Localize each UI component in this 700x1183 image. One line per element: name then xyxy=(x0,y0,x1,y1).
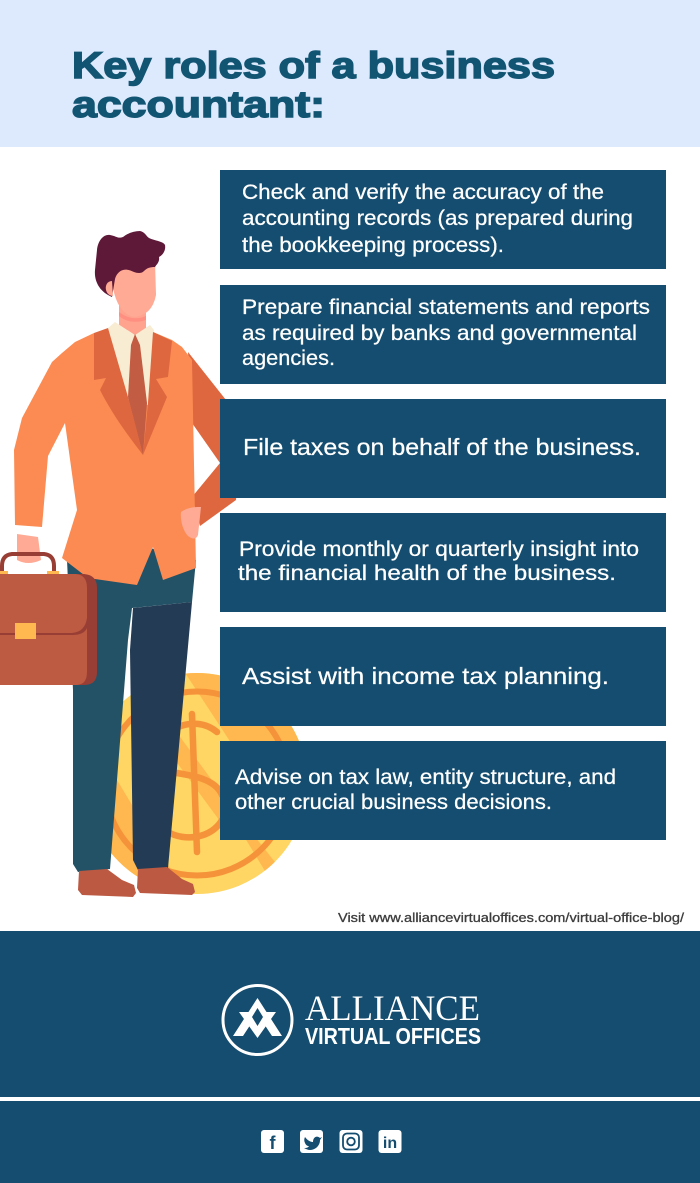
shoes xyxy=(78,869,136,897)
header panel xyxy=(0,0,700,147)
neck xyxy=(119,300,146,340)
source link text: Visit www.alliancevirtualoffices.com/virtual-office-blog/ xyxy=(338,911,685,925)
panel: monthly insight xyxy=(220,513,666,612)
panel: file taxes: File taxes on behalf of the business. xyxy=(243,434,641,460)
panel: monthly insight: the financial health of the business. xyxy=(238,562,616,585)
trousers xyxy=(67,548,196,872)
illustration: coin xyxy=(111,673,299,894)
face xyxy=(112,262,156,317)
title xyxy=(72,45,555,125)
panel: check records: accounting records (as prepared during xyxy=(242,207,633,230)
panel: check records: Check and verify the accuracy of the xyxy=(242,181,604,204)
panel: financial statements: agencies. xyxy=(242,347,335,370)
tie xyxy=(128,334,147,455)
briefcase xyxy=(0,554,97,685)
icon: facebook: f xyxy=(270,1133,276,1153)
logo text: ALLIANCE xyxy=(305,988,480,1028)
illustration: accountant figure xyxy=(0,231,240,897)
panel: check records: the bookkeeping process). xyxy=(242,234,504,257)
icon: linkedin: in xyxy=(383,1135,397,1152)
hand on hip xyxy=(181,507,201,538)
panel: financial statements xyxy=(220,285,666,384)
footer panel: social xyxy=(0,1101,700,1183)
panel: financial statements: as required by banks and governmental xyxy=(242,322,637,345)
footer panel: logo xyxy=(0,931,700,1097)
panel: file taxes xyxy=(220,399,666,498)
jacket xyxy=(14,332,196,585)
panel: tax planning xyxy=(220,627,666,726)
hair xyxy=(95,231,165,297)
icon: twitter xyxy=(300,1130,323,1153)
title: Key roles of a business xyxy=(72,45,555,86)
icon: facebook xyxy=(261,1130,284,1153)
back arm xyxy=(188,352,240,526)
logo text xyxy=(305,988,481,1049)
logo icon xyxy=(223,986,292,1054)
ear xyxy=(106,281,113,296)
icon: instagram xyxy=(340,1130,362,1153)
icon: linkedin xyxy=(378,1130,402,1153)
panel: tax planning: Assist with income tax planning. xyxy=(242,663,609,689)
lower hand xyxy=(17,534,41,563)
panel: monthly insight: Provide monthly or quarterly insight into xyxy=(239,538,639,561)
panel: advise: Advise on tax law, entity structure, and xyxy=(235,766,616,789)
panel: financial statements: Prepare financial statements and reports xyxy=(242,296,650,319)
panel: advise: other crucial business decisions. xyxy=(235,791,552,814)
panel: advise xyxy=(220,741,666,840)
logo text: VIRTUAL OFFICES xyxy=(305,1023,481,1049)
title: accountant: xyxy=(72,84,325,125)
panel: check records xyxy=(220,170,666,269)
collar xyxy=(108,322,154,405)
lapels xyxy=(94,328,143,455)
